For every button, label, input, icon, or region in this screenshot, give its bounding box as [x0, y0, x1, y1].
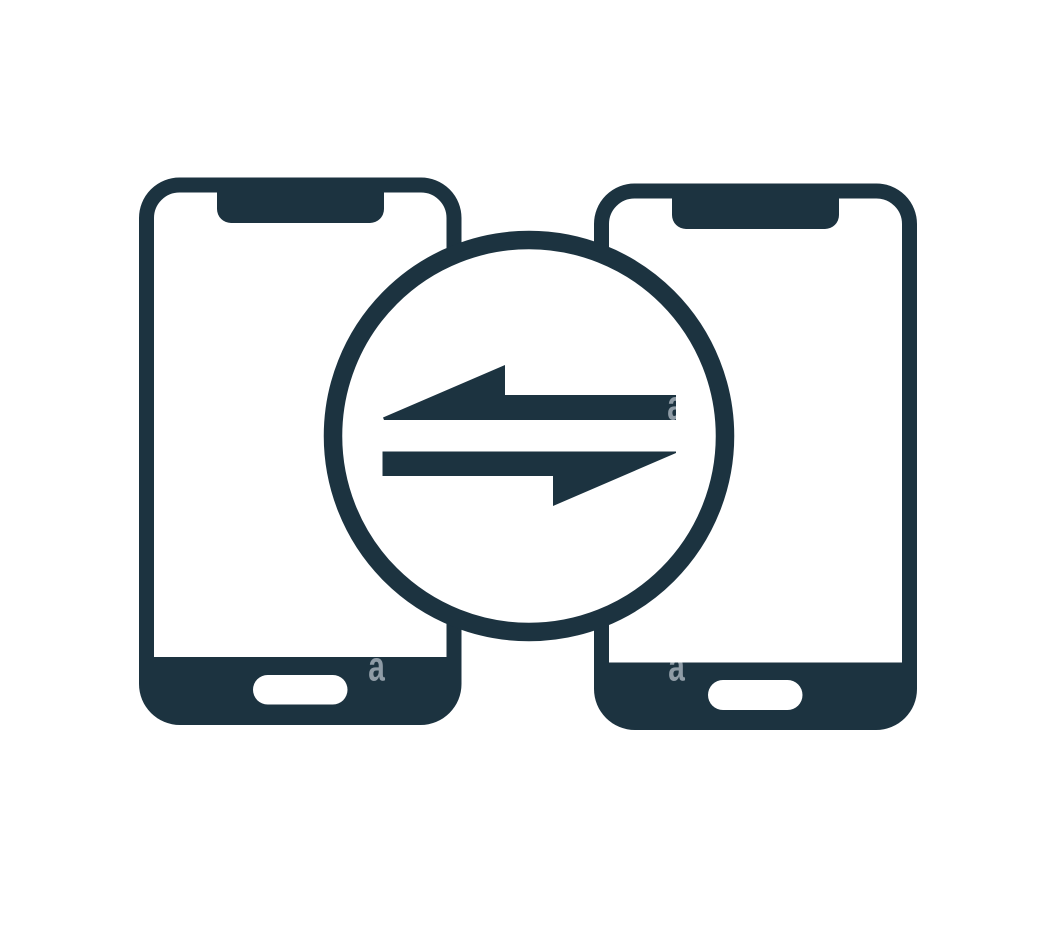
icon: right phone — [594, 191, 917, 730]
watermark marks: a — [667, 381, 684, 429]
illustration: two phones exchanging data — [139, 178, 917, 730]
watermark marks — [368, 381, 685, 690]
arrow: pointing right — [382, 452, 676, 506]
icon: left phone — [139, 185, 462, 725]
icon: exchange circle — [333, 240, 725, 632]
watermark marks: a — [368, 642, 385, 690]
arrow: pointing left — [383, 365, 676, 420]
watermark marks: a — [668, 642, 685, 690]
